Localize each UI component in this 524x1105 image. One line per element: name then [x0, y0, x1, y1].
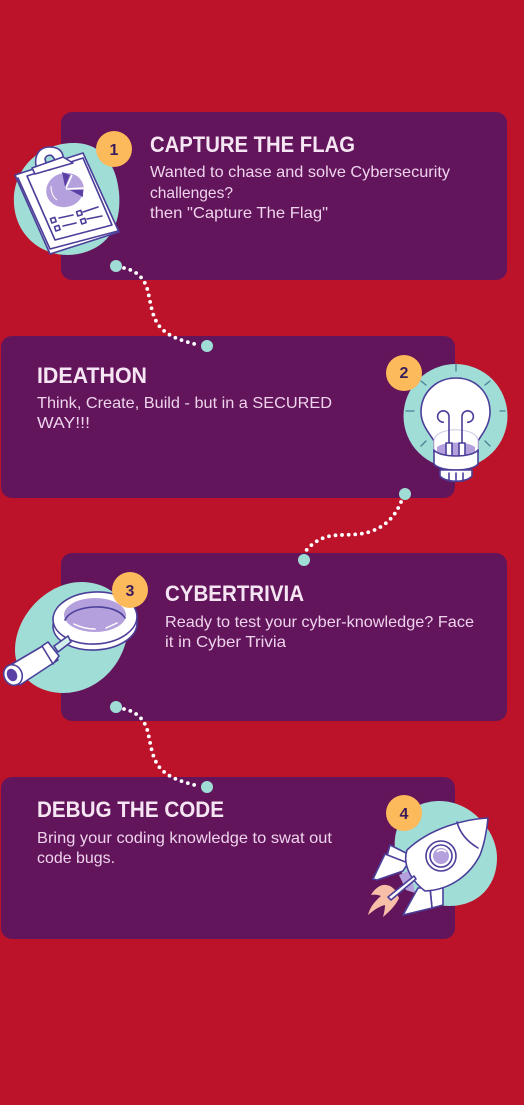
badge: number 2: 2: [400, 365, 409, 382]
badge: number 2: [386, 355, 422, 391]
panel: capture the flag: [61, 112, 507, 280]
text: cybertrivia description: [165, 614, 474, 651]
badge: number 1: 1: [110, 142, 119, 159]
panel: debug the code: [1, 777, 455, 939]
heading: cybertrivia: CYBERTRIVIA: [165, 581, 304, 606]
text: capture the flag description: challenges?: [150, 185, 233, 202]
text: cybertrivia description: it in Cyber Trivia: [165, 634, 286, 651]
badge: number 3: [112, 572, 148, 608]
icon: light bulb: [404, 364, 508, 482]
text: ideathon description: [37, 395, 332, 432]
badge: number 3: 3: [126, 583, 135, 600]
text: cybertrivia description: Ready to test your cyber-knowledge? Face: [165, 614, 474, 631]
panel: cybertrivia: [61, 553, 507, 721]
text: debug the code description: [37, 830, 333, 867]
connector: step 2 to 3: [298, 488, 411, 566]
heading: capture the flag: CAPTURE THE FLAG: [150, 132, 355, 157]
text: capture the flag description: [150, 164, 450, 222]
icon: rocket: [368, 801, 497, 917]
text: ideathon description: WAY!!!: [37, 415, 90, 432]
badge: number 1: [96, 131, 132, 167]
heading: debug the code: DEBUG THE CODE: [37, 797, 224, 822]
connector: step 3 to 4: [110, 701, 213, 793]
text: capture the flag description: then "Capture The Flag": [150, 205, 328, 222]
text: capture the flag description: Wanted to chase and solve Cybersecurity: [150, 164, 450, 181]
panel: ideathon: [1, 336, 455, 498]
badge: number 4: 4: [400, 806, 409, 823]
icon: magnifying glass: [0, 582, 138, 693]
text: debug the code description: Bring your coding knowledge to swat out: [37, 830, 333, 847]
badge: number 4: [386, 795, 422, 831]
text: debug the code description: code bugs.: [37, 850, 115, 867]
heading: ideathon: IDEATHON: [37, 363, 147, 388]
icon: clipboard with pie chart: [14, 143, 119, 255]
text: ideathon description: Think, Create, Build - but in a SECURED: [37, 395, 332, 412]
connector: step 1 to 2: [110, 260, 213, 352]
